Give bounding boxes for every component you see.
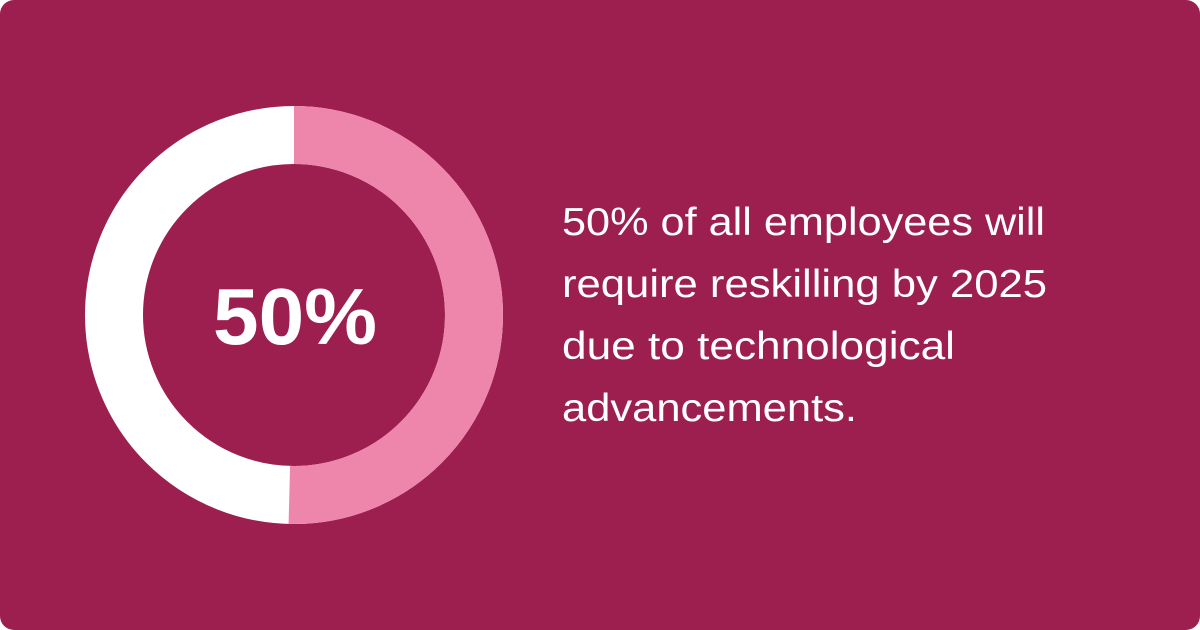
text block: statistic description xyxy=(562,201,1047,430)
donut center value: 50% xyxy=(213,272,377,361)
text block: statistic description: require reskilling by 2025 xyxy=(562,263,1047,306)
text block: statistic description: due to technological xyxy=(562,325,955,368)
text block: statistic description: 50% of all employees will xyxy=(562,201,1045,244)
text block: statistic description: advancements. xyxy=(562,387,857,430)
donut chart xyxy=(114,135,474,495)
